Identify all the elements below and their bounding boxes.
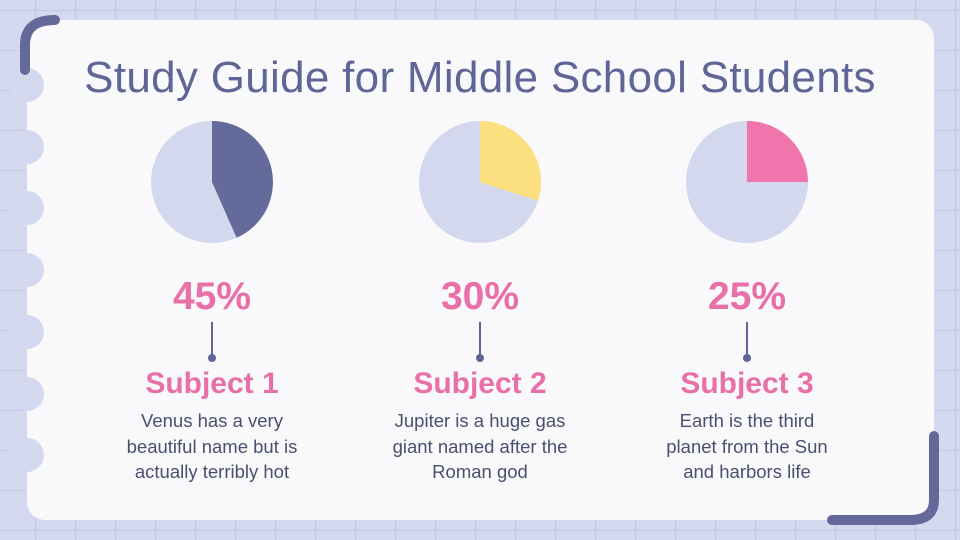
pie 3 (686, 121, 808, 243)
column: subject 2: Subject 2 (413, 367, 547, 400)
column: subject 2: Roman god (432, 461, 528, 482)
column: subject 3: and harbors life (683, 461, 811, 482)
column: subject 1: Venus has a very (141, 410, 283, 431)
pie 2 (419, 121, 541, 243)
column: subject 2: Jupiter is a huge gas (395, 410, 565, 431)
column: subject 2: giant named after the (393, 436, 567, 456)
column: subject 3: 25% (708, 275, 786, 318)
column: subject 1: actually terribly hot (135, 461, 289, 482)
column: subject 2 (393, 275, 567, 482)
column: subject 3 (666, 275, 828, 482)
title: Study Guide for Middle School Students (84, 53, 876, 102)
column: subject 3: planet from the Sun (666, 436, 828, 456)
column: subject 3: Earth is the third (680, 410, 814, 431)
pie 1 (151, 121, 273, 243)
column: subject 1: 45% (173, 275, 251, 318)
column: subject 1: beautiful name but is (127, 436, 297, 456)
column: subject 1: Subject 1 (145, 367, 279, 400)
column: subject 2: 30% (441, 275, 519, 318)
column: subject 1 (127, 275, 297, 482)
column: subject 3: Subject 3 (680, 367, 814, 400)
